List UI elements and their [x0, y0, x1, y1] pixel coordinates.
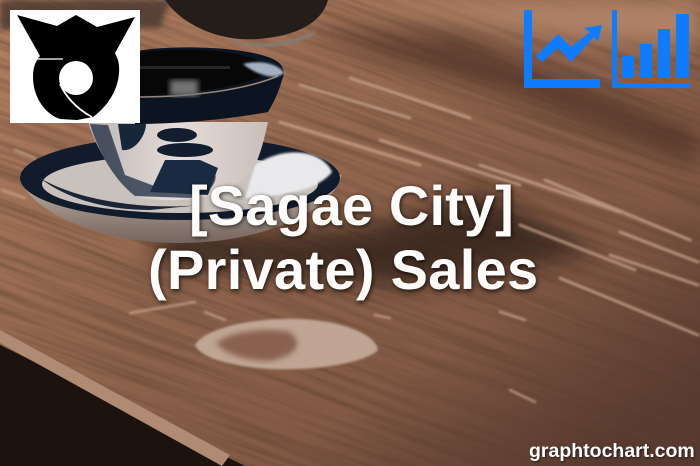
title: (Private) Sales [149, 240, 539, 303]
city emblem [10, 10, 140, 123]
dark cup in background [165, 0, 328, 47]
title: [Sagae City] [189, 174, 514, 237]
title [148, 174, 539, 303]
saucer top [20, 136, 340, 220]
watermark: site name: graphtochart.com [530, 441, 696, 463]
cup body [88, 122, 268, 200]
wood streaks [2, 78, 698, 402]
saucer underside [20, 175, 341, 243]
cup rim and dark band [135, 47, 284, 124]
icon: bar chart [612, 10, 690, 88]
watermark: site name: graphtochart.com [529, 440, 695, 462]
title: [Sagae City] [190, 175, 515, 238]
water ring stain [195, 319, 378, 369]
icon: line chart [524, 10, 602, 88]
title: (Private) Sales [148, 238, 538, 301]
teacup and saucer [20, 47, 341, 243]
